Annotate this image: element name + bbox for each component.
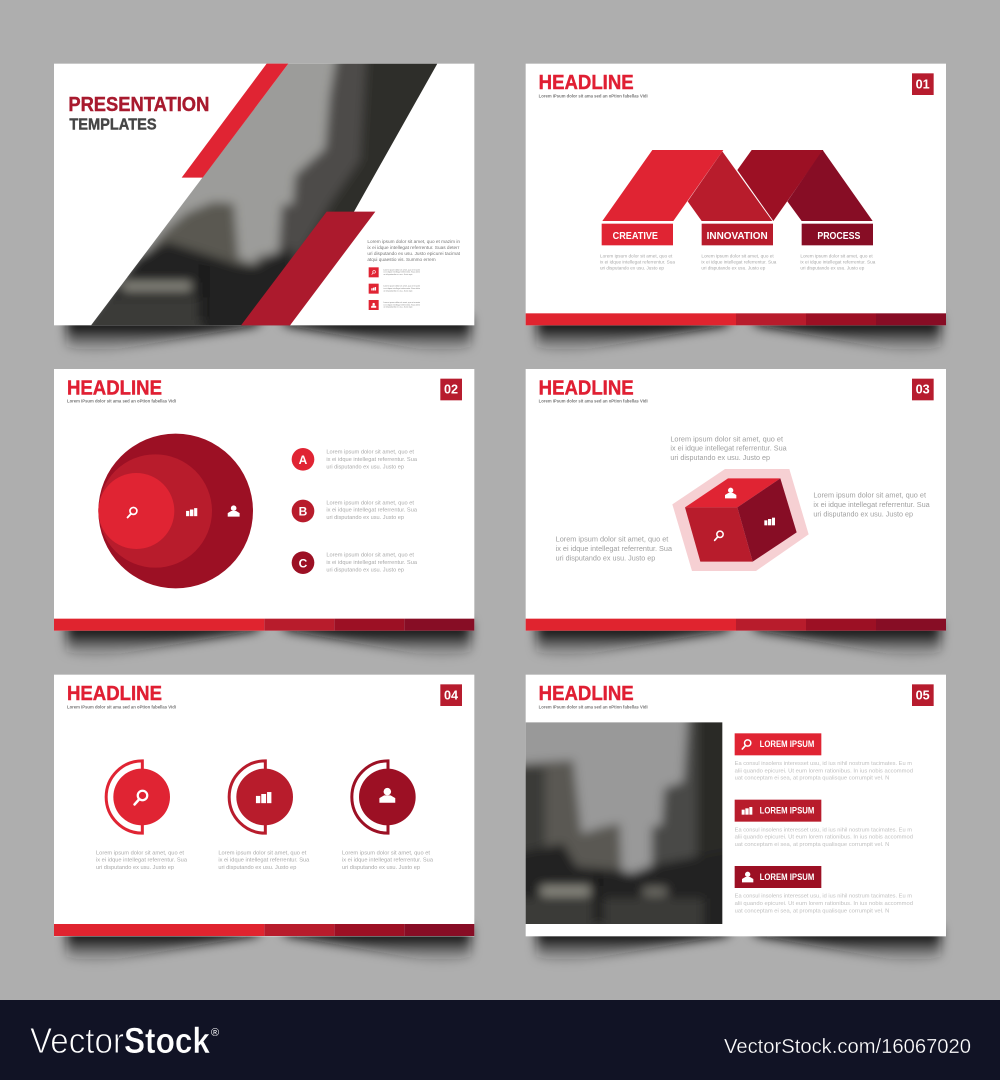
heading: HEADLINE — [67, 683, 162, 705]
heading: Lorem iPsum dolor sit ama sed an oPtion fabellas Vidi — [539, 399, 648, 404]
heading: HEADLINE — [539, 72, 634, 94]
ringed circle: search — [106, 761, 170, 833]
text: innovation: uri disputando ex usu. Justo ep — [701, 266, 766, 272]
panel: 05 photo and list — [500, 675, 946, 963]
label: innovation: INNOVATION — [707, 231, 768, 242]
panel: 02 nested circles — [54, 369, 474, 658]
panel: presentation templates cover — [54, 47, 474, 353]
item A: ix ei idque intellegat referrentur. Sua — [326, 457, 418, 463]
text: top — [670, 434, 788, 462]
text: process — [800, 254, 876, 272]
text: third column: uri disputando ex usu. Justo ep — [342, 865, 420, 871]
icon list: ix ei idque intellegat referrentur. Suas dete — [383, 287, 420, 290]
list item 2 — [735, 800, 913, 848]
text: left — [556, 535, 673, 562]
watermark footer band — [0, 1000, 1000, 1080]
text: left: Lorem ipsum dolor sit amet, quo et — [556, 535, 668, 544]
nested circle diagram — [98, 434, 253, 588]
label: process — [802, 224, 873, 245]
item B: B — [299, 505, 308, 519]
label: process: PROCESS — [817, 231, 861, 242]
heading: HEADLINE — [539, 377, 634, 399]
list item 3: alii quando epicurei. Ut eum lorem rationibus. In ius nobis accommod — [735, 901, 913, 907]
intro text: atqui quaestio vis. Summo errem — [367, 257, 436, 262]
title: TEMPLATES — [69, 117, 157, 134]
page number: 01 — [916, 77, 930, 91]
dark red diagonal strip — [241, 212, 375, 325]
text: first column: Lorem ipsum dolor sit amet, quo et — [96, 850, 184, 856]
list item 3: Ea consul insolens interesset usu, id ius nihil nostrum tacimates. Eu m — [735, 894, 912, 900]
panel: 03 cube — [526, 369, 946, 658]
icon list: uri disputando ex usu. Justo epic — [383, 306, 413, 309]
item C: uri disputando ex usu. Justo ep — [326, 567, 404, 573]
text: left: ix ei idque intellegat referrentur. Sua — [556, 544, 673, 553]
item B: uri disputando ex usu. Justo ep — [326, 515, 404, 521]
text: first column — [96, 850, 188, 871]
text: first column: uri disputando ex usu. Justo ep — [96, 865, 174, 871]
text: right: ix ei idque intellegat referrentur. Sua — [813, 500, 931, 509]
icon list: uri disputando ex usu. Justo epic — [383, 273, 413, 276]
cube diagram — [672, 469, 809, 571]
heading: Lorem iPsum dolor sit ama sed an oPtion fabellas Vidi — [67, 399, 176, 404]
footer colour bar — [54, 619, 474, 631]
label: creative: CREATIVE — [613, 231, 658, 242]
brand logo: Stock — [124, 1020, 211, 1061]
text: innovation — [701, 254, 777, 272]
text: first column: ix ei idque intellegat referrentur. Sua — [96, 858, 188, 864]
footer colour bar — [526, 619, 946, 631]
text: creative — [600, 254, 675, 272]
item B: ix ei idque intellegat referrentur. Sua — [326, 508, 418, 514]
text: process: uri disputando ex usu. Justo ep — [800, 266, 865, 272]
page number — [912, 684, 934, 706]
heading: HEADLINE — [539, 683, 634, 705]
heading: HEADLINE — [67, 377, 162, 399]
text: creative: uri disputando ex usu. Justo ep — [600, 266, 664, 272]
list item 2: Ea consul insolens interesset usu, id ius nihil nostrum tacimates. Eu m — [735, 827, 912, 833]
text: top: ix ei idque intellegat referrentur. Sua — [670, 444, 788, 453]
brand logo: ® — [211, 1027, 219, 1039]
text: right — [813, 491, 931, 518]
panel: 04 three ringed circles — [54, 675, 474, 963]
item A: Lorem ipsum dolor sit amet, quo et — [326, 450, 414, 456]
item B — [292, 500, 418, 522]
page number: 04 — [444, 688, 458, 702]
text: creative: ix ei idque intellegat referrentur. Sua — [600, 260, 675, 266]
label: creative — [602, 224, 673, 245]
text: second column: ix ei idque intellegat referrentur. Sua — [218, 858, 310, 864]
icon list: Lorem ipsum dolor sit amet, quo et mazim — [383, 301, 420, 304]
text: process: Lorem ipsum dolor sit amet, quo et — [800, 254, 873, 260]
text: right: uri disputando ex usu. Justo ep — [813, 509, 913, 518]
text: third column: Lorem ipsum dolor sit amet, quo et — [342, 850, 430, 856]
page number — [440, 684, 462, 706]
text: second column: uri disputando ex usu. Justo ep — [218, 865, 296, 871]
text: right: Lorem ipsum dolor sit amet, quo et — [813, 491, 926, 500]
list item 2: LOREM IPSUM — [760, 806, 814, 816]
brand logo — [30, 1020, 219, 1061]
list item 3: LOREM IPSUM — [760, 872, 814, 882]
list item 2: uat conceptam ei sea, at prompta qualisque corrumpit vel. N — [735, 842, 889, 848]
intro text — [367, 239, 461, 262]
footer colour bar — [54, 924, 474, 936]
item C: C — [299, 556, 308, 570]
text: second column: Lorem ipsum dolor sit amet, quo et — [218, 850, 307, 856]
text: third column: ix ei idque intellegat referrentur. Sua — [342, 858, 434, 864]
label: innovation — [702, 224, 773, 245]
item A: uri disputando ex usu. Justo ep — [326, 464, 404, 470]
page number: 02 — [444, 383, 458, 397]
item B: Lorem ipsum dolor sit amet, quo et — [326, 500, 414, 506]
page number: 05 — [916, 688, 930, 702]
intro text: ix ei idque intellegat referrentur. Suas deterr — [367, 245, 460, 250]
text: process: ix ei idque intellegat referrentur. Sua — [800, 260, 876, 266]
ringed circle: person — [352, 761, 416, 833]
text: creative: Lorem ipsum dolor sit amet, quo et — [600, 254, 673, 260]
title: PRESENTATION — [68, 93, 209, 116]
bright red diagonal strip — [182, 64, 288, 178]
item A — [292, 448, 418, 471]
list item 1 — [735, 733, 913, 782]
list item 1: uat conceptam ei sea, at prompta qualisque corrumpit vel. N — [735, 776, 889, 782]
panel: 01 creative innovation process — [526, 64, 946, 353]
text: innovation: Lorem ipsum dolor sit amet, quo et — [701, 254, 774, 260]
page number — [912, 379, 934, 400]
ringed circle: chart — [229, 761, 293, 833]
footer colour bar — [526, 313, 946, 325]
page number — [912, 73, 934, 95]
folded ribbon M diagram — [602, 150, 873, 221]
item C: ix ei idque intellegat referrentur. Sua — [326, 560, 418, 566]
list item 1: LOREM IPSUM — [760, 739, 814, 749]
text: second column — [218, 850, 310, 871]
icon list: ix ei idque intellegat referrentur. Suas dete — [383, 271, 420, 274]
list item 2: alii quando epicurei. Ut eum lorem rationibus. In ius nobis accommod — [735, 835, 913, 841]
text: left: uri disputando ex usu. Justo ep — [556, 553, 655, 562]
intro text: uri disputando ex usu. Justo epicurei tacimat — [367, 251, 461, 256]
photo: blurred city skyline — [526, 722, 722, 924]
text: top: Lorem ipsum dolor sit amet, quo et — [670, 434, 783, 443]
heading: Lorem iPsum dolor sit ama sed an oPtion fabellas Vidi — [539, 93, 648, 98]
text: top: uri disputando ex usu. Justo ep — [670, 453, 770, 462]
item A: A — [299, 453, 308, 467]
item C: Lorem ipsum dolor sit amet, quo et — [326, 553, 414, 559]
list item 3 — [735, 866, 913, 914]
brand logo: Vector — [30, 1020, 124, 1061]
icon list: uri disputando ex usu. Justo epic — [383, 289, 413, 292]
icon list — [369, 267, 420, 310]
page number — [440, 379, 462, 400]
list item 3: uat conceptam ei sea, at prompta qualisque corrumpit vel. N — [735, 908, 889, 914]
list item 1: alii quando epicurei. Ut eum lorem rationibus. In ius nobis accommod — [735, 768, 913, 774]
text: third column — [342, 850, 434, 871]
icon list: Lorem ipsum dolor sit amet, quo et mazim — [383, 268, 420, 271]
item C — [292, 551, 418, 574]
icon list: ix ei idque intellegat referrentur. Suas dete — [383, 303, 420, 306]
cover photo: blurred city skyline — [91, 64, 438, 326]
text: innovation: ix ei idque intellegat referrentur. Sua — [701, 260, 777, 266]
heading: Lorem iPsum dolor sit ama sed an oPtion fabellas Vidi — [539, 704, 648, 709]
intro text: Lorem ipsum dolor sit amet, quo et mazim in — [367, 239, 460, 244]
icon list: Lorem ipsum dolor sit amet, quo et mazim — [383, 285, 420, 288]
image id: VectorStock.com/16067020 — [724, 1036, 971, 1058]
title — [68, 93, 209, 134]
list item 1: Ea consul insolens interesset usu, id ius nihil nostrum tacimates. Eu m — [735, 761, 912, 767]
page number: 03 — [916, 383, 930, 397]
heading: Lorem iPsum dolor sit ama sed an oPtion fabellas Vidi — [67, 704, 176, 709]
